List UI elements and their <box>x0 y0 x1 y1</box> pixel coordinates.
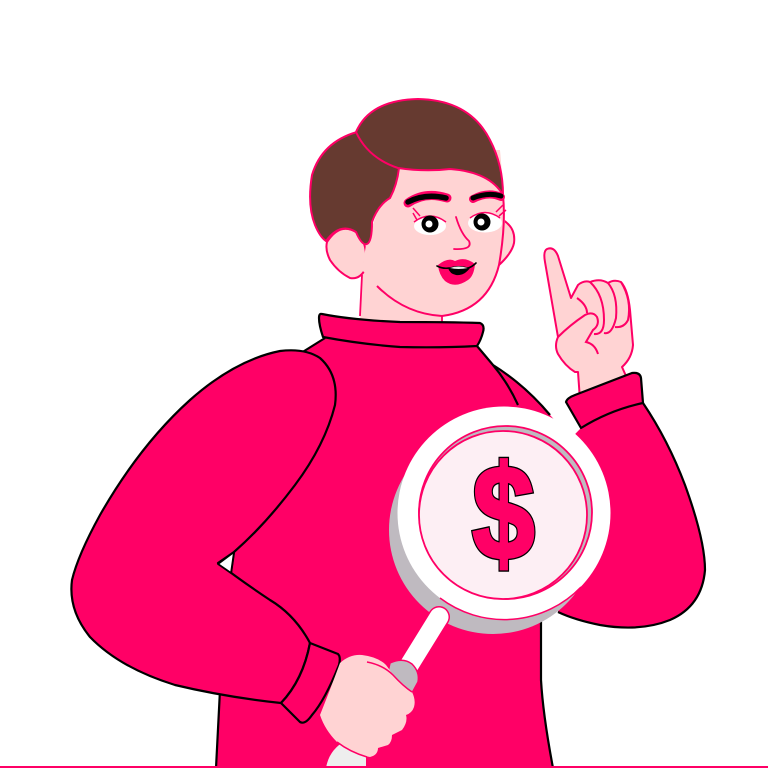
collar <box>319 314 484 347</box>
face <box>362 150 505 316</box>
fist <box>320 655 415 757</box>
person torso <box>216 338 600 768</box>
right eye <box>468 205 506 232</box>
notch <box>218 552 234 573</box>
dollar sign: $ <box>472 439 535 588</box>
mouth <box>437 259 476 285</box>
outer white rim <box>398 406 610 620</box>
back hair <box>310 132 399 244</box>
lens <box>419 431 587 599</box>
nose <box>454 217 470 249</box>
right cuff <box>566 373 643 428</box>
handle <box>405 617 439 672</box>
left ear <box>326 229 366 278</box>
person right arm <box>530 390 705 628</box>
dollar sign: $ <box>472 439 535 588</box>
right eyebrow <box>473 194 501 199</box>
left cuff <box>281 643 340 723</box>
right hand pointing up <box>544 248 633 400</box>
glass drop shadow <box>389 426 597 634</box>
handle end <box>326 741 366 768</box>
left eye <box>413 208 446 235</box>
head <box>310 99 514 316</box>
magnifying glass <box>389 406 610 672</box>
right ear <box>499 220 514 265</box>
inner gray crescent <box>419 426 592 599</box>
ferrule <box>388 660 418 693</box>
neck <box>360 270 442 322</box>
ground line <box>0 766 768 768</box>
top hair <box>356 99 503 195</box>
left hand gripping handle <box>320 655 418 757</box>
left eyebrow <box>408 195 447 203</box>
person left arm <box>71 350 336 703</box>
